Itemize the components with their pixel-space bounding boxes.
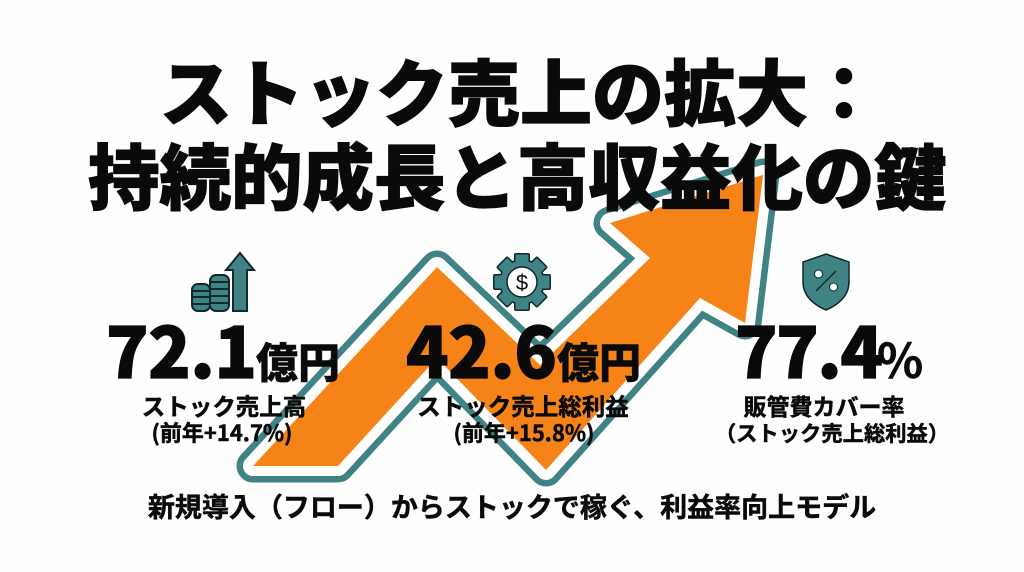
metric: stock gross profit <box>406 298 641 448</box>
metric: stock gross profit: 億円 <box>557 330 641 391</box>
metric: stock gross profit: ストック売上総利益 <box>417 388 629 422</box>
growth arrow <box>253 175 763 470</box>
metric: stock sales: (前年+14.7%) <box>152 416 292 448</box>
icon: coins with up arrow <box>192 253 254 311</box>
icon: gear with dollar: $ <box>516 270 528 295</box>
icon: shield with percent <box>803 254 849 310</box>
metric: stock sales: 億円 <box>256 330 340 391</box>
metric: SG&A coverage: % <box>877 322 923 392</box>
title <box>88 36 946 225</box>
metric: SG&A coverage: 販管費カバー率 <box>744 388 904 422</box>
metric: SG&A coverage: （ストック売上総利益） <box>715 417 949 448</box>
title: 持続的成長と高収益化の鍵 <box>88 121 946 225</box>
metric: stock sales <box>106 298 340 448</box>
title: ストック売上の拡大： <box>160 36 880 141</box>
metric: SG&A coverage <box>715 298 949 448</box>
metric: stock sales: 72.1 <box>106 298 256 399</box>
metric: stock gross profit: (前年+15.8%) <box>454 416 594 448</box>
metric: stock sales: ストック売上高 <box>142 388 306 422</box>
icon: gear with dollar <box>493 253 551 311</box>
tagline: 新規導入（フロー）からストックで稼ぐ、利益率向上モデル <box>148 486 876 525</box>
metric: stock gross profit: 42.6 <box>406 298 556 399</box>
metric: SG&A coverage: 77.4 <box>735 298 881 399</box>
